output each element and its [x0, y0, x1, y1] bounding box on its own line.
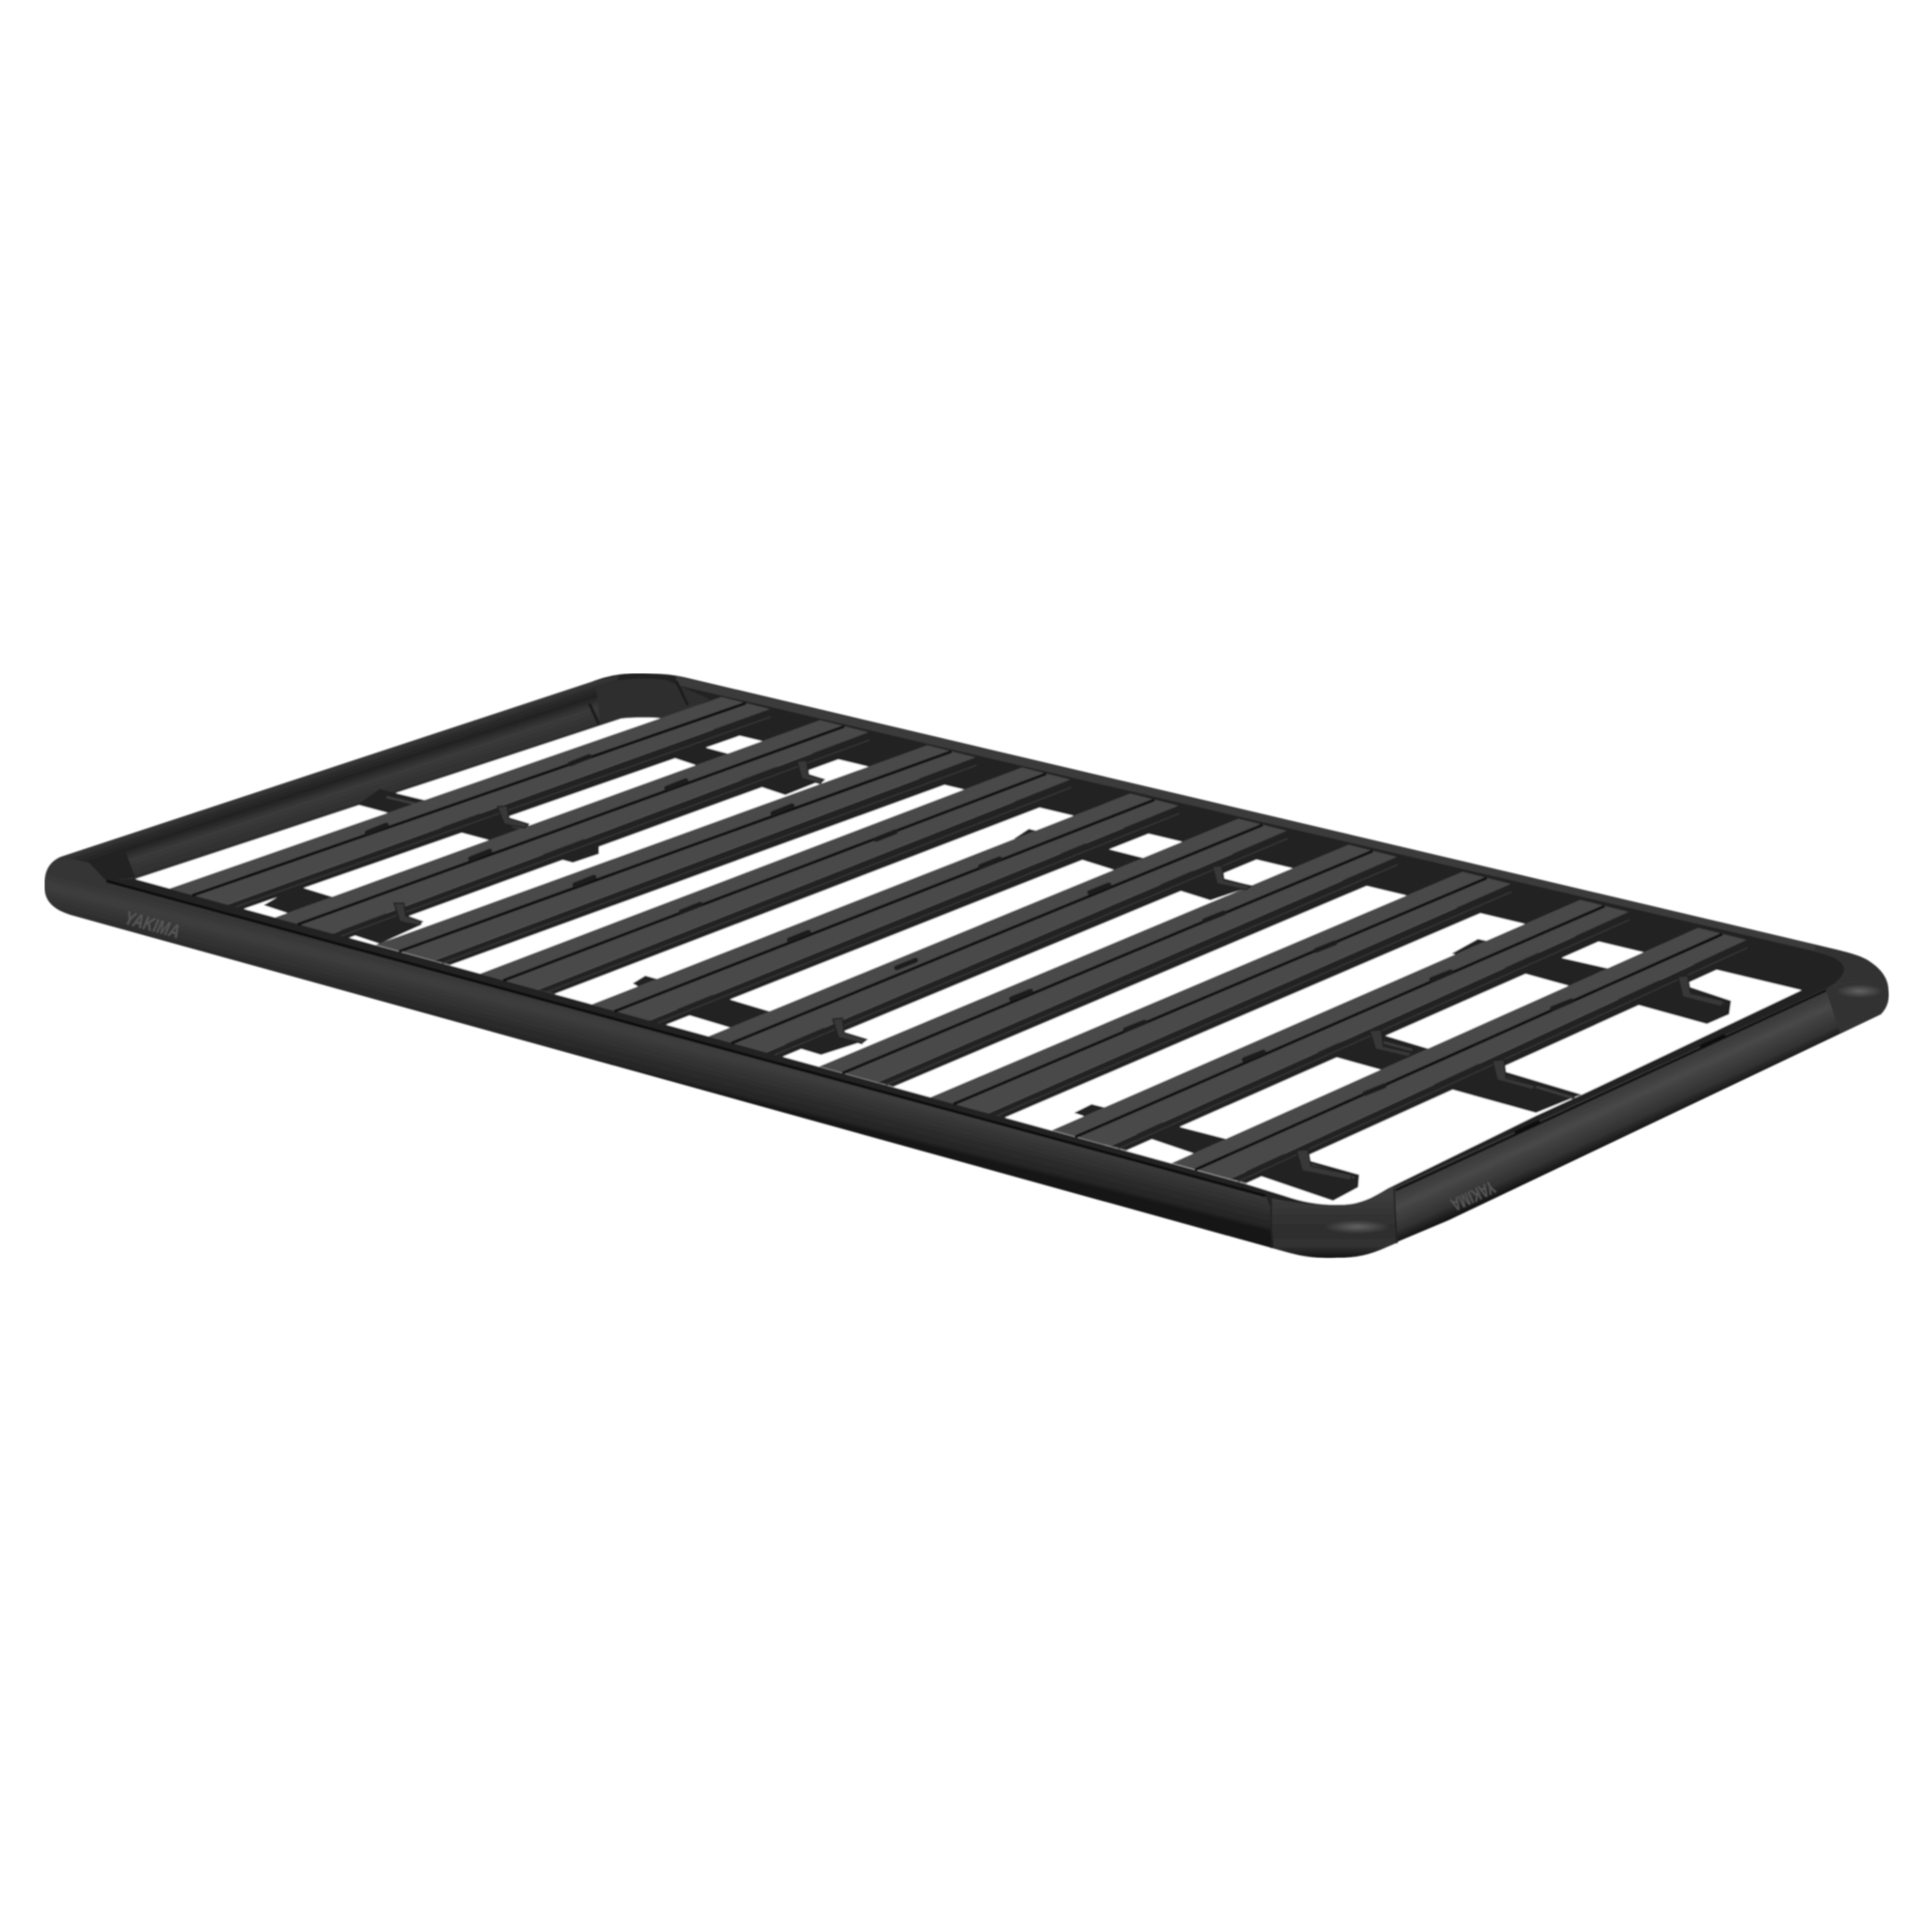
roof rack assembly — [44, 673, 1889, 1258]
rail 5 — [591, 794, 1180, 1025]
crossbar top ridges — [386, 797, 1724, 1178]
crossbar segment: rear centre — [1014, 829, 1253, 900]
logo: YAKIMA on front bar: YAKIMA — [123, 908, 182, 943]
rail 1 — [169, 697, 772, 909]
rail 7 — [819, 844, 1399, 1087]
rail 8 — [930, 871, 1513, 1118]
right bar groove line — [1396, 989, 1829, 1190]
front bar groove line — [106, 881, 1265, 1196]
right side bar — [1388, 982, 1889, 1243]
logo: YAKIMA on right bar: YAKIMA — [1447, 1176, 1498, 1214]
crossbar segment: rear left — [669, 747, 824, 795]
right corner rim — [1814, 945, 1889, 992]
rail clips — [367, 756, 1572, 1094]
crossbar segment: front right — [1074, 1104, 1359, 1201]
crossbar segment: front centre — [633, 976, 867, 1055]
crossbar brackets — [394, 760, 1724, 1180]
rail 9 — [1052, 900, 1631, 1151]
crossbar segment: rear right — [1452, 939, 1731, 1024]
front bar — [44, 857, 1292, 1253]
near corner piece — [1270, 1186, 1398, 1258]
crossbar segment: front left — [264, 886, 422, 944]
rail 4 — [480, 767, 1072, 994]
right bar edge marks — [1515, 1036, 1725, 1133]
rail 10 — [1172, 927, 1748, 1183]
right corner piece — [1826, 982, 1889, 1034]
rail 2 — [274, 721, 870, 938]
back bar outer rim — [676, 676, 1820, 952]
left side bar — [61, 676, 618, 881]
frame: outer silhouette — [44, 673, 1889, 1258]
rear left corner recess — [589, 678, 710, 726]
front left corner recess — [89, 852, 135, 881]
rail 6 — [708, 819, 1289, 1057]
crossbar segment: left middle — [357, 789, 599, 863]
frame opening — [135, 718, 1802, 1205]
rail 3 — [376, 746, 978, 965]
crossbar segment: middle right — [1314, 1032, 1581, 1113]
right corner highlight — [1836, 984, 1883, 998]
